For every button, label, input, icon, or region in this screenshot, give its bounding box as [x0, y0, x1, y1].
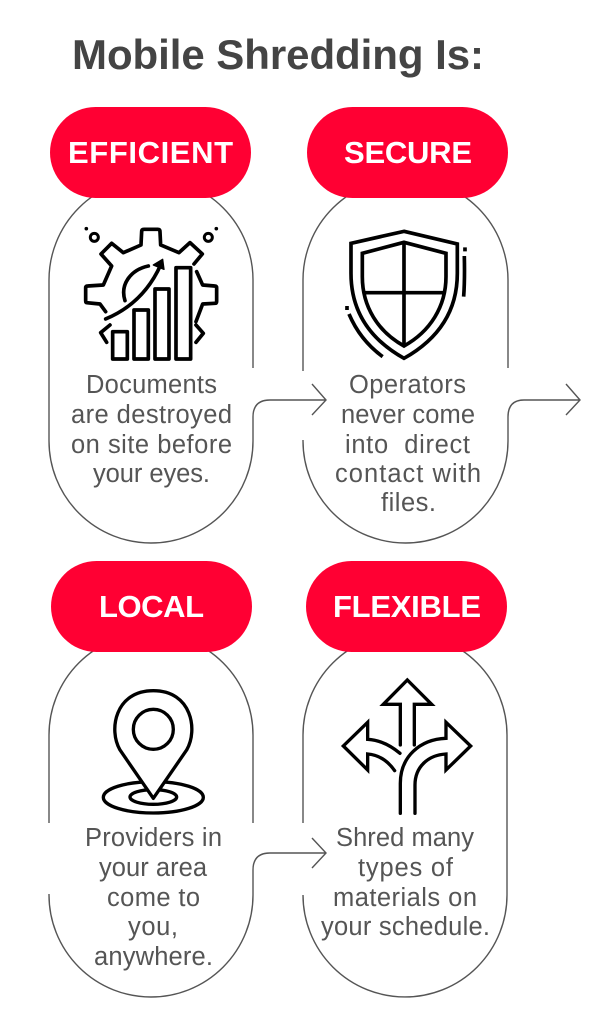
badge: efficient: EFFICIENT	[68, 135, 233, 170]
badge: secure	[307, 107, 508, 198]
badge: secure: SECURE	[344, 135, 472, 170]
text: secure description: contact with	[335, 460, 481, 488]
title: Mobile Shredding Is:	[72, 31, 484, 78]
text: secure description: into direct	[345, 431, 470, 459]
panel: flexible	[303, 561, 507, 997]
text: efficient description: Documents	[86, 371, 217, 399]
icon: shield	[347, 231, 465, 358]
text: efficient description: are destroyed	[71, 401, 232, 429]
text: flexible description: types of	[358, 854, 454, 882]
panel: local	[49, 561, 326, 997]
text: local description: Providers in	[85, 824, 222, 852]
badge: efficient	[50, 107, 251, 198]
text: local description	[85, 824, 222, 971]
text: flexible description: materials on	[333, 884, 477, 912]
capsule outline: flexible	[303, 633, 507, 997]
capsule outline: efficient	[49, 178, 326, 543]
panel: secure	[303, 107, 580, 543]
badge: flexible	[306, 561, 507, 652]
text: local description: you,	[128, 913, 178, 941]
text: efficient description	[71, 371, 232, 488]
text: secure description	[335, 371, 481, 517]
capsule outline: secure	[303, 178, 580, 543]
icon: map pin	[103, 691, 203, 813]
text: local description: come to	[107, 884, 200, 912]
text: efficient description: on site before	[71, 431, 232, 459]
text: efficient description: your eyes.	[93, 460, 210, 488]
text: local description: your area	[99, 854, 208, 882]
capsule outline: local	[49, 633, 326, 997]
text: flexible description: Shred many	[336, 824, 474, 852]
text: flexible description: your schedule.	[321, 913, 490, 941]
badge: local: LOCAL	[99, 589, 204, 624]
text: secure description: files.	[381, 489, 436, 517]
text: local description: anywhere.	[94, 943, 213, 971]
icon: gear with rising bars	[85, 227, 218, 359]
icon: three-way arrows	[343, 680, 471, 813]
badge: local	[51, 561, 252, 652]
text: secure description: Operators	[349, 371, 466, 399]
text: secure description: never come	[341, 401, 475, 429]
text: flexible description	[321, 824, 490, 941]
panel: efficient	[49, 107, 326, 543]
badge: flexible: FLEXIBLE	[333, 589, 481, 624]
